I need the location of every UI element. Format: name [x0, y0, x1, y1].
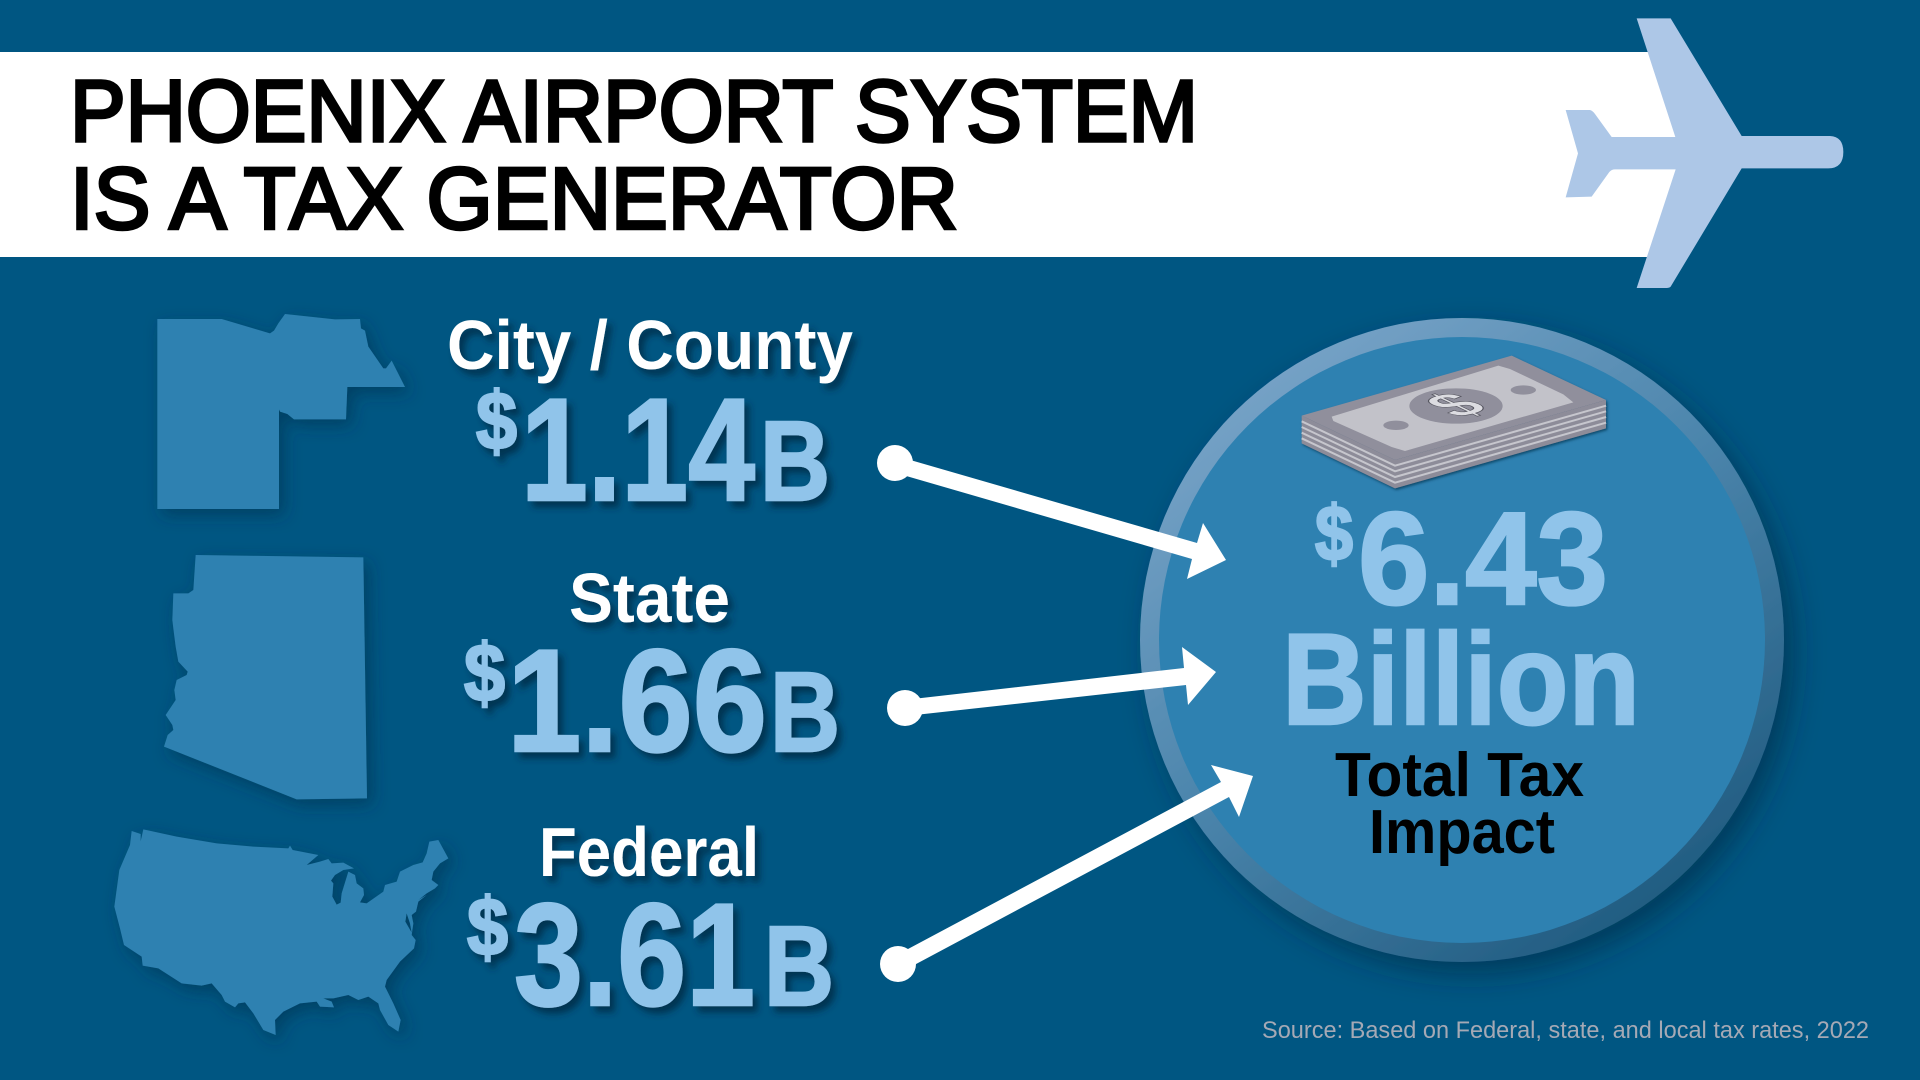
- icon: Maricopa County map: [157, 314, 405, 509]
- title: PHOENIX AIRPORT SYSTEM: [70, 63, 1198, 160]
- total figure: 6.43: [1358, 485, 1608, 632]
- federal figure: $: [467, 882, 508, 973]
- federal figure: B: [764, 903, 834, 1029]
- icon: stack of money: [1302, 356, 1606, 488]
- icon: stack of money: $: [1408, 386, 1504, 425]
- total figure: [1282, 485, 1640, 752]
- icon: Arizona map: [164, 555, 367, 799]
- state figure: 1.66: [507, 619, 767, 782]
- total figure: $: [1315, 489, 1353, 577]
- total circle: [1140, 318, 1784, 962]
- state figure: $: [464, 628, 505, 719]
- total tax impact label: [1335, 741, 1584, 867]
- icon: airplane: [1566, 18, 1843, 288]
- arrow: city / county to total: [877, 445, 1226, 579]
- title: [70, 63, 1198, 248]
- state figure: B: [770, 649, 840, 775]
- city / county figure: B: [760, 398, 830, 524]
- arrow: state to total: [887, 647, 1216, 726]
- federal figure: Federal: [539, 813, 759, 891]
- source note: Source: Based on Federal, state, and local tax rates, 2022: [1262, 1017, 1869, 1044]
- total tax impact label: Total Tax: [1335, 741, 1584, 810]
- city / county figure: $: [476, 376, 517, 467]
- arrow: federal to total: [880, 765, 1253, 982]
- city / county figure: [447, 306, 853, 531]
- title banner: [0, 52, 1680, 257]
- federal figure: 3.61: [514, 873, 755, 1036]
- title: IS A TAX GENERATOR: [70, 150, 958, 248]
- city / county figure: City / County: [447, 306, 853, 384]
- total figure: Billion: [1282, 606, 1640, 752]
- icon: United States map: [114, 829, 448, 1035]
- city / county figure: 1.14: [521, 368, 755, 531]
- state figure: State: [569, 559, 730, 637]
- total tax impact label: Impact: [1369, 798, 1555, 867]
- state figure: [464, 559, 840, 782]
- federal figure: [467, 813, 834, 1036]
